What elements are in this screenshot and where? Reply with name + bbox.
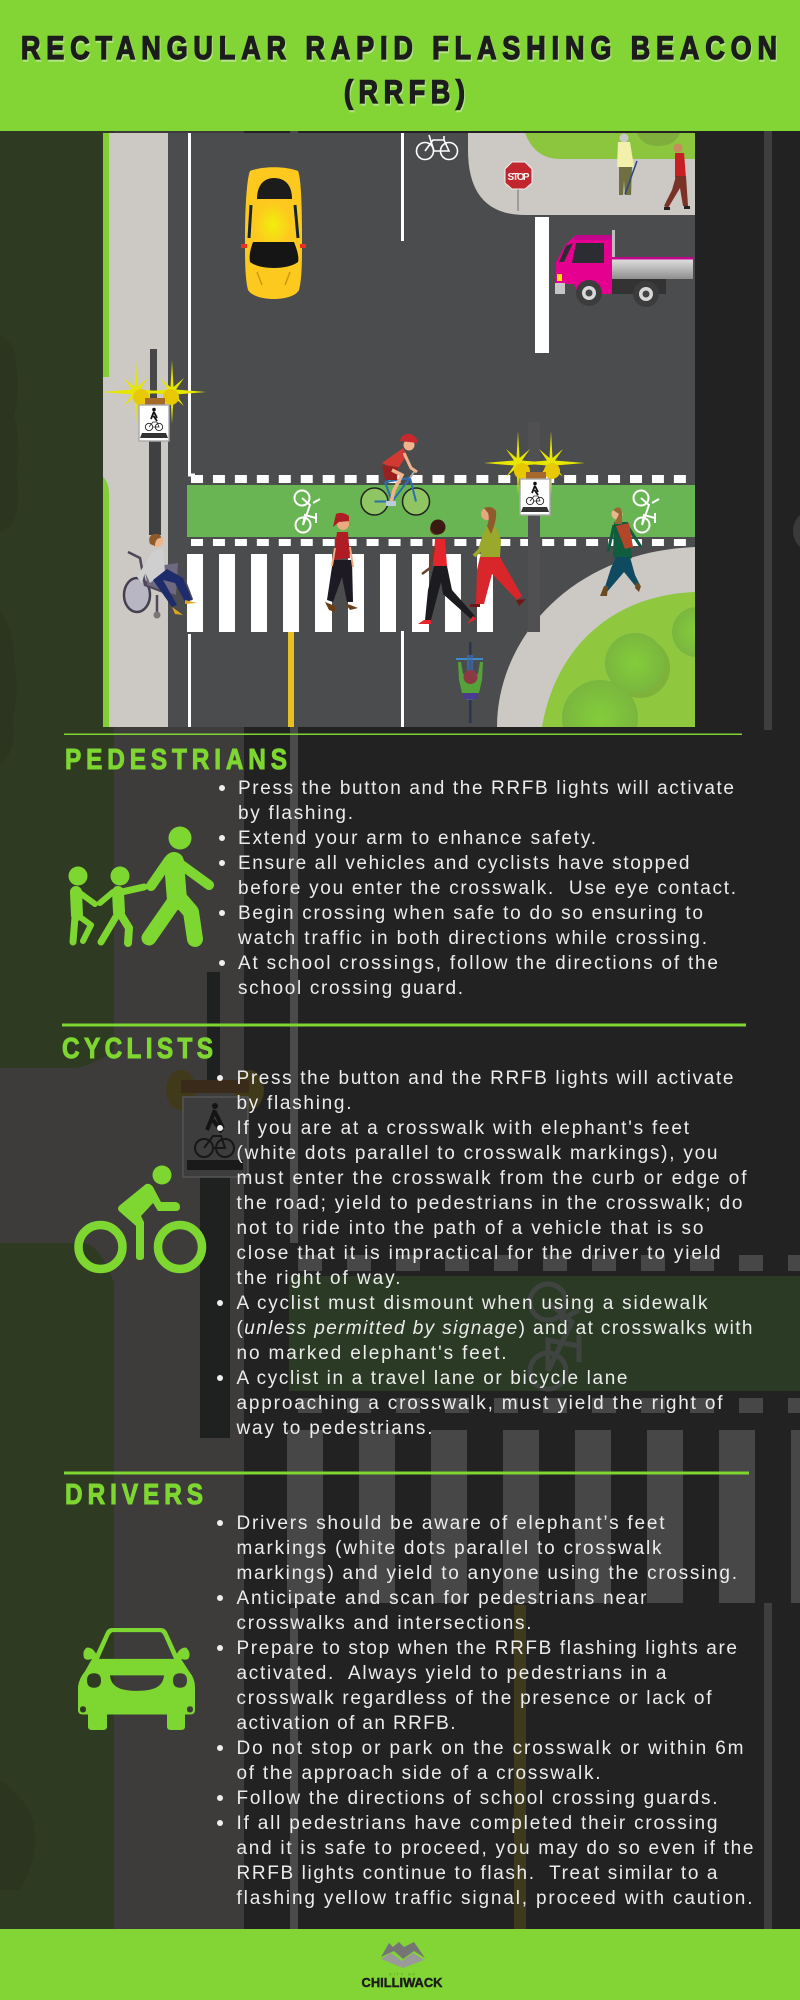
icon: cyclist bbox=[78, 1166, 202, 1269]
text block: driver rules: activated. Always yield to pedestrians in a bbox=[236, 1663, 667, 1684]
icon: car front view bbox=[78, 1628, 195, 1730]
text block: pedestrian rules: school crossing guard. bbox=[238, 978, 463, 999]
icon: bike lane marking right bbox=[634, 490, 659, 532]
pedestrian: person in wheelchair bbox=[124, 534, 197, 618]
icon: stop sign bbox=[505, 162, 532, 211]
logo: City of Chilliwack: CITY OF bbox=[389, 1972, 416, 1976]
text block: driver rules: and it is safe to proceed, you may do so even if the bbox=[236, 1838, 754, 1859]
icon: stop sign: STOP bbox=[508, 172, 530, 183]
icon: bicycle road marking bbox=[416, 135, 458, 160]
text block: pedestrian rules: Ensure all vehicles and cyclists have stopped bbox=[238, 853, 690, 874]
text block: driver rules: Do not stop or park on the crosswalk or within 6m bbox=[236, 1738, 744, 1759]
text block: driver rules: Anticipate and scan for pedestrians near bbox=[236, 1588, 647, 1609]
text block: cyclist rules: by flashing. bbox=[236, 1093, 352, 1114]
title banner bbox=[0, 0, 800, 131]
text block: pedestrian rules: Begin crossing when safe to do so ensuring to bbox=[238, 903, 703, 924]
text block: pedestrian rules: Extend your arm to enhance safety. bbox=[238, 828, 596, 849]
text block: driver rules bbox=[217, 1513, 754, 1909]
pedestrian: man with red cap bbox=[325, 513, 358, 612]
text block: driver rules: markings) and yield to anyone using the crossing. bbox=[236, 1563, 737, 1584]
text block: driver rules: activation of an RRFB. bbox=[236, 1713, 456, 1734]
text block: pedestrian rules: before you enter the crosswalk. Use eye contact. bbox=[238, 878, 736, 899]
cyclist from above bbox=[456, 642, 483, 723]
text block: pedestrian rules: At school crossings, follow the directions of the bbox=[238, 953, 718, 974]
text block: driver rules: RRFB lights continue to flash. Treat similar to a bbox=[236, 1863, 718, 1884]
text block: pedestrian rules: watch traffic in both directions while crossing. bbox=[237, 928, 707, 949]
text block: driver rules: Prepare to stop when the RRFB flashing lights are bbox=[236, 1638, 737, 1659]
cyclist in bike lane bbox=[361, 434, 430, 515]
logo: City of Chilliwack: CHILLIWACK bbox=[362, 1976, 442, 1990]
icon: bike lane marking left bbox=[294, 490, 320, 532]
intersection illustration bbox=[102, 133, 722, 756]
panel: cyclists bbox=[62, 1024, 752, 1439]
pedestrian: woman in olive top bbox=[470, 507, 526, 607]
heading: cyclists: CYCLISTS bbox=[62, 1032, 213, 1064]
text block: driver rules: markings (white dots parallel to crosswalk bbox=[236, 1538, 662, 1559]
heading: pedestrians: PEDESTRIANS bbox=[65, 743, 287, 775]
road lines bbox=[188, 133, 549, 727]
poles and flashing beacons bbox=[102, 349, 585, 632]
footer banner bbox=[0, 1929, 800, 2000]
text block: cyclist rules: Press the button and the RRFB lights will activate bbox=[236, 1068, 734, 1089]
text block: driver rules: crosswalk regardless of the presence or lack of bbox=[236, 1688, 712, 1709]
text block: cyclist rules: (white dots parallel to crosswalk markings), you bbox=[236, 1143, 718, 1164]
text block: cyclist rules bbox=[217, 1068, 752, 1439]
icon: yellow car bbox=[241, 167, 306, 299]
title text: (RRFB) bbox=[344, 75, 465, 111]
text block: driver rules: Drivers should be aware of elephant’s feet bbox=[236, 1513, 665, 1534]
left sidewalk bbox=[103, 133, 168, 727]
crosswalk bars bbox=[187, 554, 493, 632]
text block: cyclist rules: (unless permitted by signage) and at crosswalks with bbox=[236, 1318, 752, 1339]
text block: cyclist rules: A cyclist in a travel lane or bicycle lane bbox=[236, 1368, 628, 1389]
text block: cyclist rules: A cyclist must dismount when using a sidewalk bbox=[236, 1293, 708, 1314]
heading: drivers: DRIVERS bbox=[65, 1478, 203, 1510]
text block: cyclist rules: the right of way. bbox=[236, 1268, 400, 1289]
bike lane bbox=[187, 475, 695, 546]
title text bbox=[21, 31, 777, 111]
text block: cyclist rules: If you are at a crosswalk with elephant's feet bbox=[236, 1118, 690, 1139]
text block: cyclist rules: must enter the crosswalk from the curb or edge of bbox=[236, 1168, 747, 1189]
icon: adult walking with two children bbox=[68, 826, 209, 943]
icon: pink truck bbox=[555, 230, 693, 307]
text block: cyclist rules: the road; yield to pedestrians in the crosswalk; do bbox=[236, 1193, 743, 1214]
text block: driver rules: crosswalks and intersections. bbox=[236, 1613, 532, 1634]
text block: cyclist rules: close that it is impractical for the driver to yield bbox=[236, 1243, 721, 1264]
bottom-right sidewalk and grass bbox=[497, 547, 695, 727]
text block: driver rules: Follow the directions of school crossing guards. bbox=[236, 1788, 718, 1809]
text block: driver rules: flashing yellow traffic signal, proceed with caution. bbox=[236, 1888, 752, 1909]
pedestrian: elder with cane bbox=[617, 134, 637, 199]
text block: driver rules: of the approach side of a crosswalk. bbox=[236, 1763, 600, 1784]
text block: driver rules: If all pedestrians have completed their crossing bbox=[236, 1813, 718, 1834]
pedestrian: man in red bbox=[664, 144, 690, 210]
title text: RECTANGULAR RAPID FLASHING BEACON bbox=[21, 31, 777, 67]
text block: cyclist rules: way to pedestrians. bbox=[236, 1418, 432, 1439]
text block: cyclist rules: not to ride into the path of a vehicle that is so bbox=[236, 1218, 704, 1239]
panel: drivers bbox=[64, 1472, 754, 1909]
text block: pedestrian rules bbox=[219, 778, 736, 999]
text block: cyclist rules: approaching a crosswalk, must yield the right of bbox=[236, 1393, 723, 1414]
text block: pedestrian rules: Press the button and the RRFB lights will activate bbox=[238, 778, 734, 799]
pedestrian: woman in red top bbox=[418, 520, 476, 624]
panel: pedestrians bbox=[64, 734, 742, 999]
pedestrian: woman with backpack bbox=[600, 507, 641, 596]
text block: pedestrian rules: by flashing. bbox=[238, 803, 353, 824]
text block: cyclist rules: no marked elephant's feet. bbox=[236, 1343, 506, 1364]
logo: City of Chilliwack bbox=[362, 1942, 442, 1990]
top-right corner sidewalk and grass bbox=[468, 133, 695, 215]
